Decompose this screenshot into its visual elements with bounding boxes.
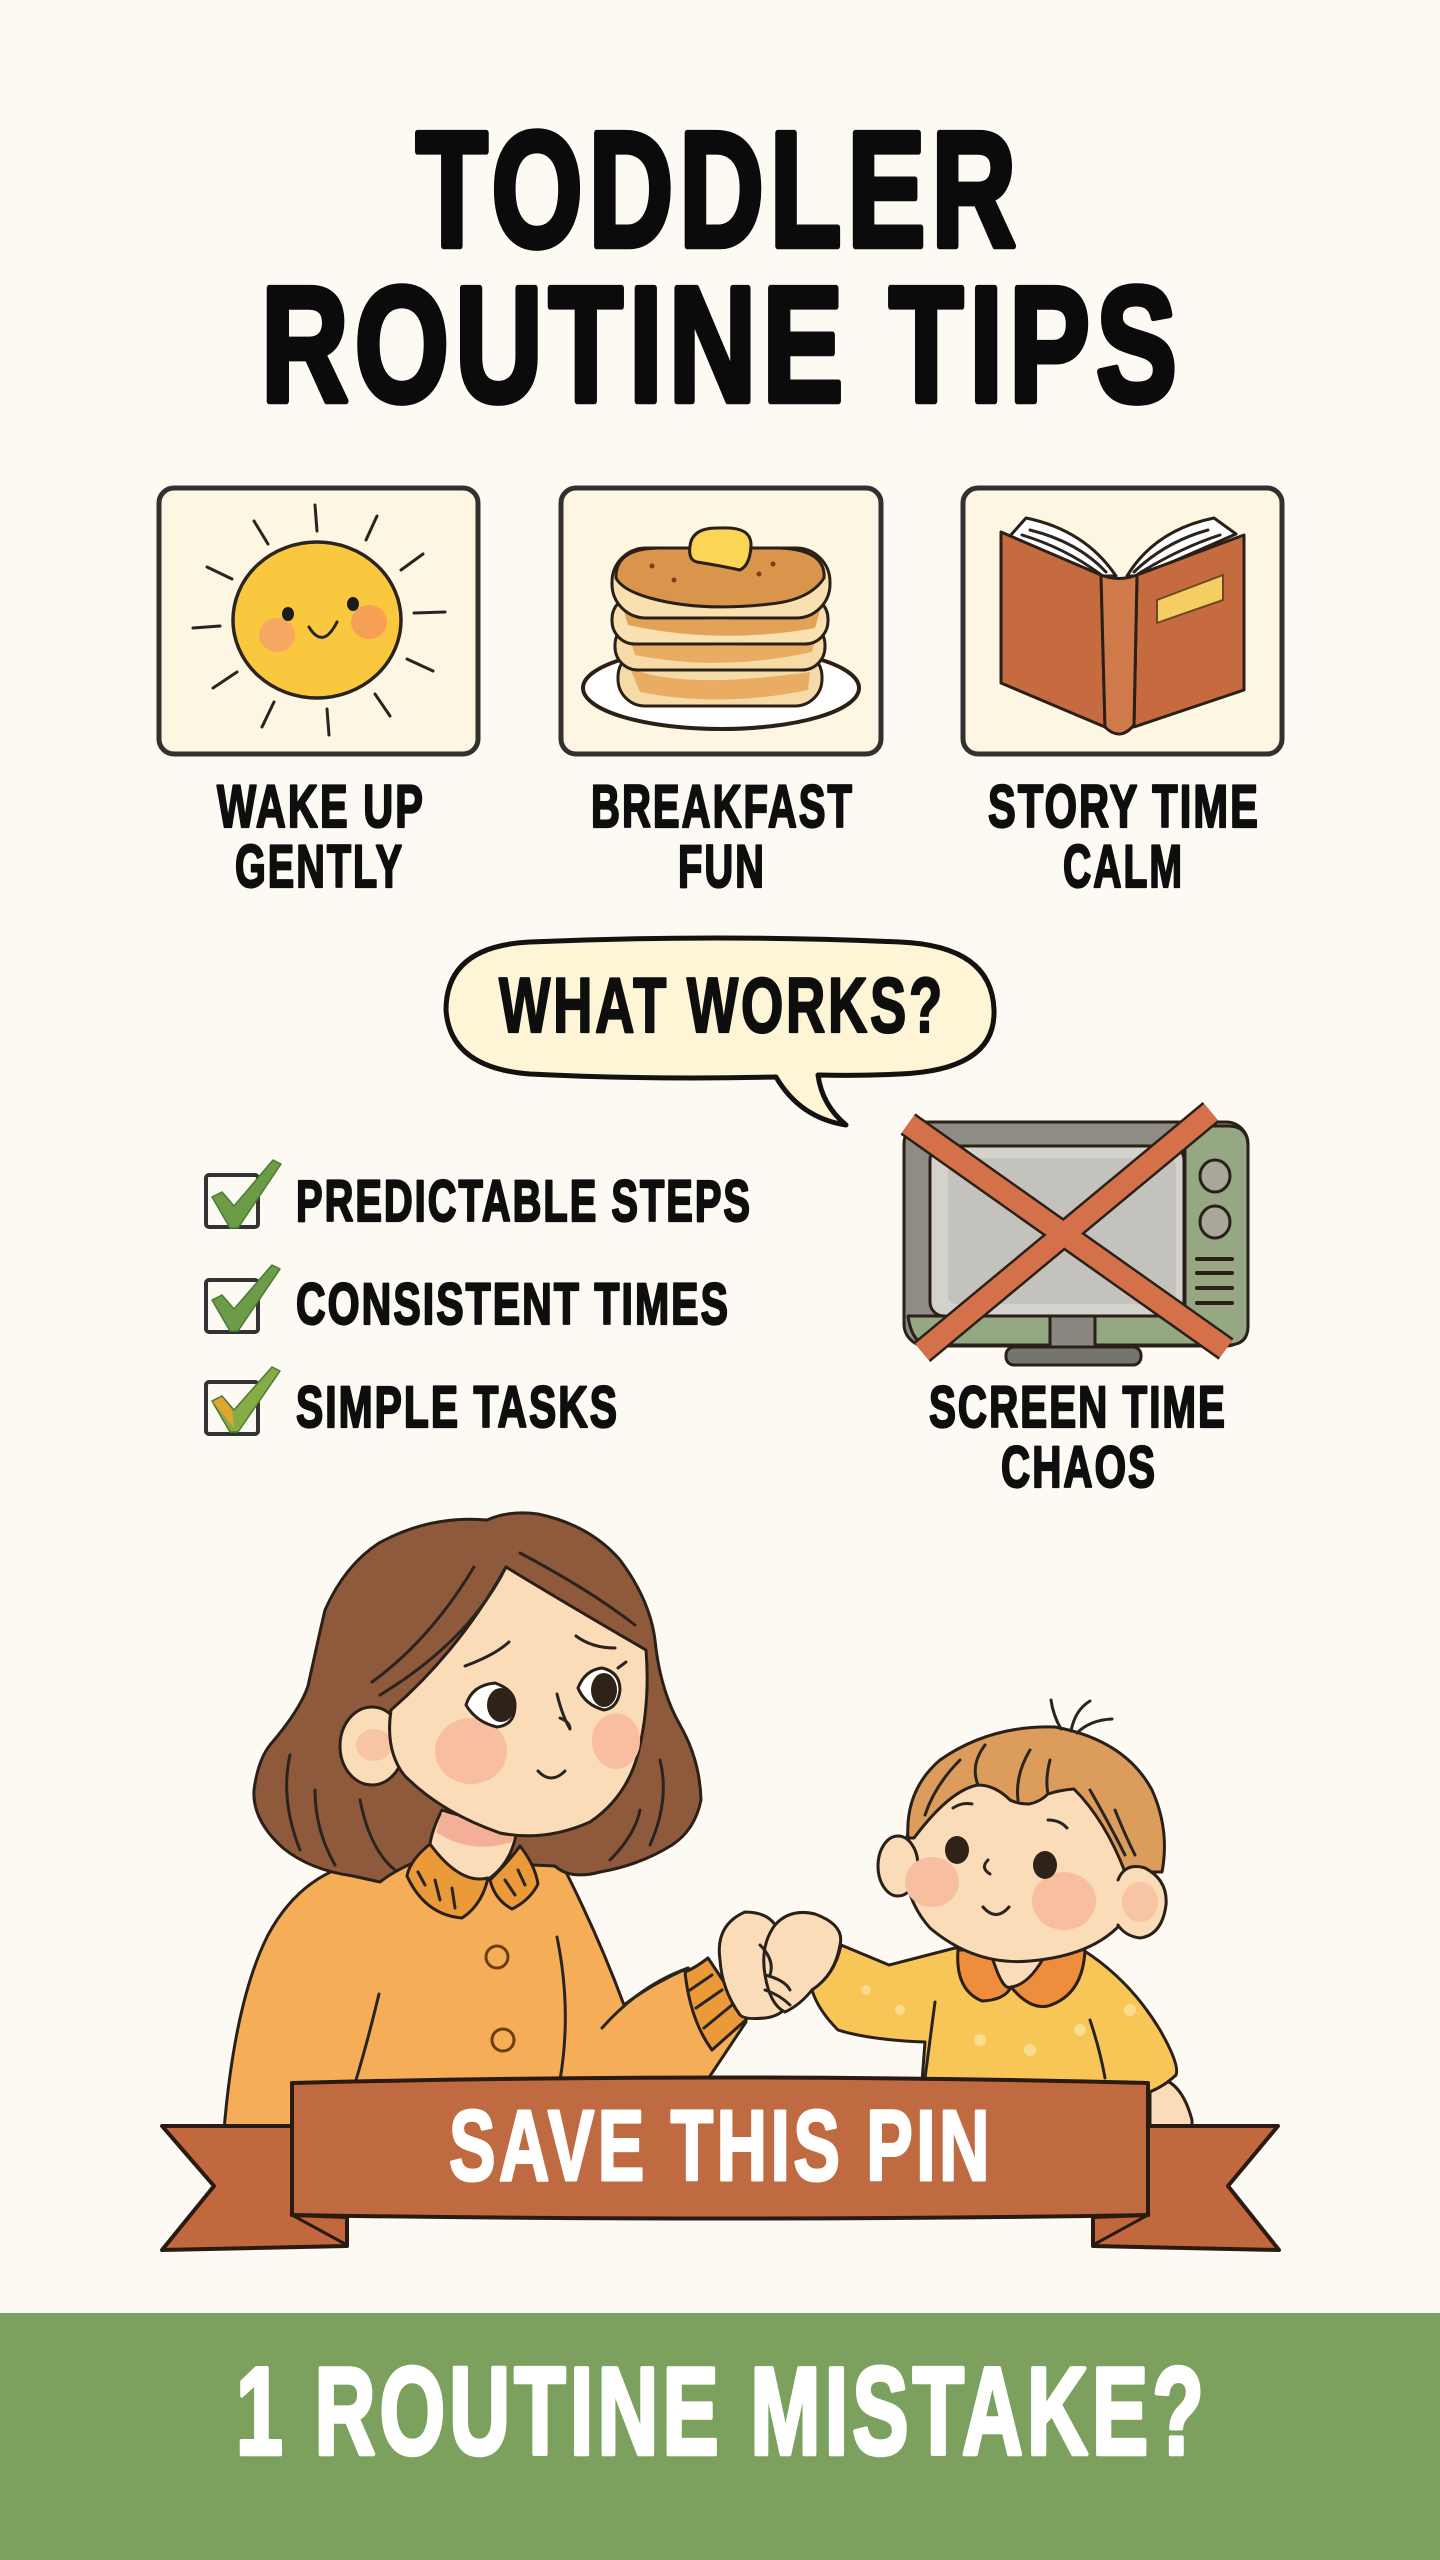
label: wake up gently: WAKE UP [217, 773, 425, 840]
label: story time calm [988, 773, 1260, 900]
label: wake up gently: GENTLY [235, 833, 404, 900]
mother hair strands [287, 1553, 663, 1870]
checklist [206, 1160, 752, 1440]
panel: breakfast fun [561, 488, 881, 754]
mother buttons [486, 1946, 508, 1968]
toddler collar [958, 1950, 1085, 2007]
label: breakfast fun: FUN [678, 833, 766, 900]
mother hair [254, 1513, 701, 1882]
heading: what works: WHAT WORKS? [499, 961, 945, 1049]
illustration: mother [224, 1513, 841, 2130]
banner right tail [1093, 2126, 1279, 2250]
item: consistent times: CONSISTENT TIMES [296, 1272, 730, 1337]
label: breakfast fun: BREAKFAST [591, 773, 854, 840]
icon: open book [1001, 518, 1244, 734]
icon: sun [193, 505, 445, 735]
mother ear [340, 1707, 404, 1785]
label: screen time chaos: SCREEN TIME [929, 1375, 1227, 1440]
toddler ears [878, 1836, 918, 1896]
banner left tail [162, 2126, 347, 2250]
toddler hair [908, 1727, 1164, 1872]
item: predictable steps: PREDICTABLE STEPS [296, 1169, 752, 1234]
ribbon banner [162, 2078, 1279, 2250]
mother collar [407, 1844, 538, 1918]
label: screen time chaos [929, 1375, 1227, 1500]
title [261, 98, 1183, 436]
icon: pancake stack [583, 528, 859, 729]
mother face [390, 1567, 647, 1836]
label: breakfast fun [591, 773, 854, 900]
mother sweater [224, 1848, 746, 2130]
item: simple tasks: SIMPLE TASKS [296, 1375, 619, 1440]
mother cuff [685, 1958, 748, 2050]
footer bar [0, 2313, 1440, 2560]
fist bump hands [719, 1912, 841, 2019]
label: screen time chaos: CHAOS [1001, 1435, 1157, 1500]
banner text: SAVE THIS PIN [449, 2090, 993, 2202]
item: simple tasks [206, 1367, 619, 1440]
item: predictable steps [206, 1160, 752, 1234]
icon: crossed out tv [904, 1112, 1248, 1365]
banner main [292, 2078, 1148, 2218]
panel: story time calm [963, 488, 1282, 754]
toddler head [905, 1760, 1150, 1962]
panel: wake up gently [159, 488, 478, 754]
label: story time calm: CALM [1063, 833, 1184, 900]
callout: what works speech bubble [446, 938, 994, 1125]
label: wake up gently [217, 773, 425, 900]
label: story time calm: STORY TIME [988, 773, 1260, 840]
toddler hand on banner [1150, 2078, 1192, 2130]
item: consistent times [206, 1265, 730, 1337]
toddler sweater [812, 1945, 1177, 2095]
mother neck [430, 1810, 516, 1881]
title: TODDLER [416, 98, 1022, 281]
illustration: toddler [812, 1700, 1192, 2130]
